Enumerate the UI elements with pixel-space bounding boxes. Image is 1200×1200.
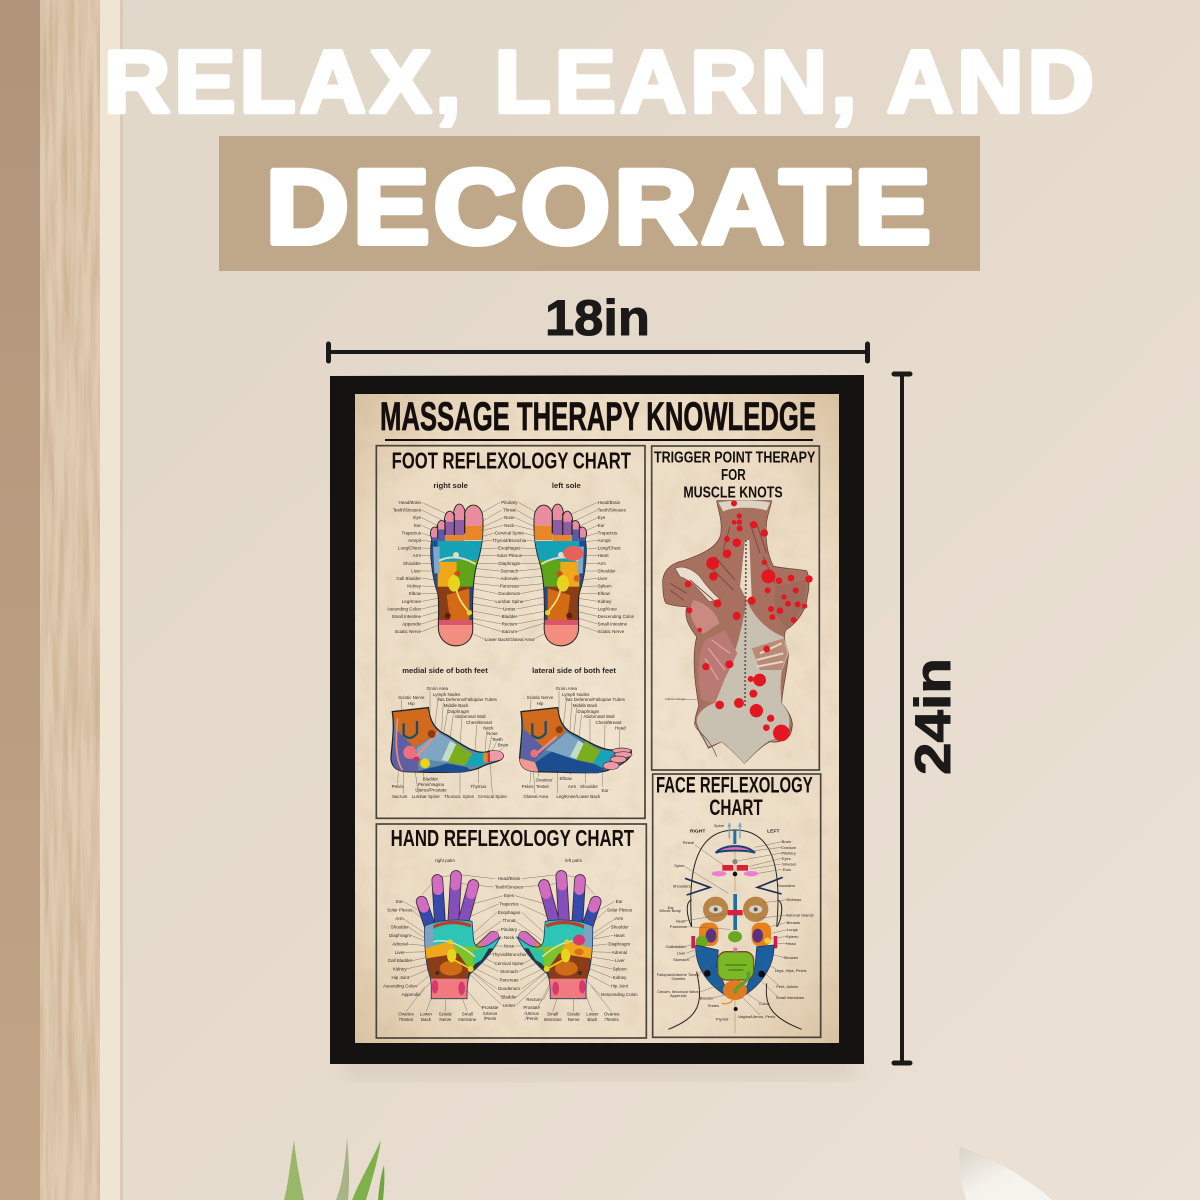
leader lines: hands xyxy=(403,875,615,1012)
labels: hands centre column xyxy=(492,876,526,1008)
labels: face: Ear xyxy=(668,905,674,910)
labels: medial foot: Chest/Breast xyxy=(466,720,493,725)
height dimension label: 24in xyxy=(905,658,961,775)
leader lines: side of feet xyxy=(398,691,619,793)
labels: left palm: Descending Colon xyxy=(601,992,638,997)
headline banner: DECORATE xyxy=(266,149,935,266)
leader lines: soles xyxy=(422,502,598,639)
labels: right sole left column: Appendix xyxy=(402,621,422,626)
labels: left palm: Sciatic xyxy=(567,1011,581,1016)
labels: face: Sinuses xyxy=(782,861,796,866)
labels: face: Bladder xyxy=(700,995,714,1000)
poster xyxy=(355,394,839,1043)
labels: left sole right column: Spleen xyxy=(598,583,612,588)
labels: left palm: Solar Plexus xyxy=(607,907,633,912)
labels: face: Pancreas xyxy=(670,924,687,929)
labels: lateral foot: Pelvis xyxy=(522,784,534,789)
labels: left sole right column: Arm xyxy=(598,561,606,566)
labels: face: Gallbladder xyxy=(665,944,687,949)
labels: left palm xyxy=(523,899,638,1022)
labels: lateral foot: Ear xyxy=(602,788,609,793)
heading: trigger point therapy: FOR xyxy=(721,467,746,484)
width dimension label: 18in xyxy=(545,290,650,346)
labels: left sole right column: Trapezius xyxy=(598,530,618,535)
sub-heading: lateral side: lateral side of both feet xyxy=(532,666,616,675)
labels: face: LEFT xyxy=(767,828,780,834)
labels: right sole left column: Ascending Colon xyxy=(387,606,422,611)
labels: lateral foot: Gluteal Area xyxy=(523,794,549,799)
labels: medial foot: Bladder xyxy=(423,776,439,781)
labels: right palm: Small xyxy=(462,1011,473,1016)
labels: right palm: Intensine xyxy=(458,1017,477,1022)
labels: hands centre column: Head/Brain xyxy=(498,876,521,881)
labels: lateral foot: Lymph Nodes xyxy=(562,692,590,697)
labels: left palm: Heart xyxy=(614,933,625,938)
labels: left palm: Intensine xyxy=(544,1017,562,1022)
labels: face: Kidneys xyxy=(787,897,801,902)
labels: face: Lungs xyxy=(787,927,798,932)
labels: left sole right column: Armpit xyxy=(598,538,611,543)
labels: medial foot: Neck xyxy=(483,725,494,730)
labels: right palm: Prostate xyxy=(482,1005,499,1010)
labels: face: Shoulders xyxy=(777,883,795,888)
labels: hands centre column: Teeth/Sinuses xyxy=(495,884,524,889)
labels: hands centre column: Stomach xyxy=(500,969,518,974)
labels: soles centre column: Adrenals xyxy=(500,576,519,581)
plant leaves xyxy=(284,1137,384,1200)
chart: right sole foot map xyxy=(428,503,488,648)
labels: hands centre column: Duodenum xyxy=(498,986,520,991)
labels: left palm: Liver xyxy=(615,958,625,963)
labels: left palm: Small xyxy=(547,1011,558,1016)
labels: left sole right column: Liver xyxy=(598,576,608,581)
labels: medial foot: Thymus xyxy=(470,784,487,789)
labels: right sole left column: Trapezius xyxy=(401,530,422,535)
headline line one: RELAX, LEARN, AND xyxy=(104,32,1098,131)
labels: medial foot: Lumbar Spine xyxy=(412,794,440,799)
labels: left sole right column: Head/Brain xyxy=(598,500,621,505)
labels: hands centre column: Ureter xyxy=(503,1003,516,1008)
labels: lateral foot: Ovaries/ xyxy=(536,777,553,782)
labels: face: Spine xyxy=(674,863,685,868)
labels: right palm: Liver xyxy=(395,950,405,955)
labels: right palm: Nerve xyxy=(439,1017,452,1022)
labels: lateral foot: Chest/Breast xyxy=(595,720,622,725)
labels: soles centre column: Esophagus xyxy=(498,545,521,550)
labels: lateral foot xyxy=(522,686,626,799)
labels: medial foot: Thoracic Spine xyxy=(444,794,474,799)
labels: medial foot: Cervical Spine xyxy=(478,794,507,799)
labels: medial foot: Pelvis xyxy=(392,784,404,789)
labels: face: RIGHT xyxy=(690,828,705,834)
panel: trigger point therapy xyxy=(652,446,819,770)
labels: right sole left column: Kidney xyxy=(407,583,422,588)
heading: face reflexology: FACE REFLEXOLOGY xyxy=(656,773,813,798)
labels: lateral foot: Hip xyxy=(537,701,544,706)
labels: left sole right column: Eye xyxy=(598,515,606,520)
labels: hands centre column: Pancreas xyxy=(500,977,519,982)
labels: lateral foot: Elbow xyxy=(560,776,573,781)
labels: lateral foot: Head xyxy=(615,725,626,730)
labels: hands centre column: Trapezius xyxy=(499,901,520,906)
labels: right palm: /Penis xyxy=(484,1016,497,1021)
picture frame xyxy=(330,375,864,1064)
chart: back muscles xyxy=(663,501,809,763)
sub-heading: left palm: left palm xyxy=(565,858,582,863)
heading: hand reflexology: HAND REFLEXOLOGY CHART xyxy=(391,825,634,851)
labels: medial foot: Abdominal Wall xyxy=(454,714,485,719)
labels: left palm: Prostate xyxy=(523,1005,541,1010)
labels: right sole left column: Teeth/Sinuses xyxy=(393,507,422,512)
heading: face reflexology xyxy=(656,773,813,820)
labels: left palm: Nerve xyxy=(568,1017,580,1022)
chart: lateral foot map xyxy=(520,708,632,773)
labels: hands centre column: Nose xyxy=(504,943,515,948)
labels: right palm: Shoulder xyxy=(391,924,409,929)
chart: left sole foot map xyxy=(529,503,589,648)
labels: left sole right column: Small Intestine xyxy=(598,621,628,626)
labels: face: Legs, Hips, Pelvis xyxy=(775,968,807,973)
sub-heading: left sole: left sole xyxy=(552,481,581,490)
labels: right sole left column: Leg/Knee xyxy=(402,599,422,604)
height dimension arrow xyxy=(894,374,910,1063)
labels: soles centre column: Bladder xyxy=(502,614,518,619)
labels: right palm: Kidney xyxy=(393,966,407,971)
labels: hands centre column: Cervical Spine xyxy=(495,961,524,966)
sub-heading: right palm: right palm xyxy=(435,858,455,863)
labels: face: Spleen xyxy=(786,934,799,939)
labels: medial foot: Nose xyxy=(487,731,498,736)
labels: left palm: /Penis xyxy=(525,1016,539,1021)
labels: face: Pituitary xyxy=(781,850,796,855)
labels: left sole right column: Leg/Knee xyxy=(598,606,617,611)
labels: face: Appendix xyxy=(670,993,687,998)
wooden door frame xyxy=(0,0,123,1200)
labels: right sole left column: Armpit xyxy=(408,538,422,543)
labels: right palm xyxy=(383,899,499,1022)
labels: face: Ovaries xyxy=(671,976,685,981)
labels: face: Feet, Ankles xyxy=(776,984,798,989)
labels: left sole right column: Lung/Chest xyxy=(598,545,621,550)
labels: face: Shoulders xyxy=(673,883,691,888)
labels: medial foot: Uterus/Prostate xyxy=(415,787,447,792)
labels: right sole left column: Shoulder xyxy=(403,561,422,566)
labels: left palm: Rectum xyxy=(526,997,542,1002)
heading: face reflexology: CHART xyxy=(709,795,763,820)
labels: face: Fallopian/Uterine Tubes, xyxy=(657,972,700,977)
labels: soles centre column: Ureter xyxy=(503,606,516,611)
labels: hands centre column: Bladder xyxy=(501,994,517,999)
labels: medial foot: Sciatic Nerve xyxy=(398,695,425,700)
labels: medial foot: Diaphragm xyxy=(447,709,470,714)
labels: right palm: /Uterus xyxy=(483,1011,498,1016)
labels: soles centre column: Cervical Spine xyxy=(495,530,524,535)
white cushion xyxy=(959,1147,1052,1200)
labels: soles centre column: Thyroid/Bronchia xyxy=(492,538,527,543)
labels: left palm: Ear xyxy=(616,899,623,904)
labels: face: Pineal xyxy=(683,840,694,845)
chart: red trigger points xyxy=(685,500,813,741)
labels: face: Liver xyxy=(677,950,686,955)
labels: left sole right column: Heart xyxy=(598,553,609,558)
labels: left sole right column xyxy=(598,500,635,634)
labels: left palm: Lower xyxy=(586,1011,599,1016)
labels: right sole left column: Ear xyxy=(414,523,422,528)
labels: right sole left column: Sciatic Nerve xyxy=(395,629,421,634)
labels: medial foot: Groin Area xyxy=(427,686,449,691)
labels: soles centre column xyxy=(485,500,535,642)
labels: face: Cranium xyxy=(781,845,797,850)
labels: soles centre column: Sacrum xyxy=(502,629,517,634)
poster title: MASSAGE THERAPY KNOWLEDGE xyxy=(380,395,816,439)
labels: left sole right column: Elbow xyxy=(598,591,611,596)
labels: left sole right column: Shoulder xyxy=(598,568,616,573)
labels: lateral foot: Abdominal Wall xyxy=(583,714,614,719)
labels: medial foot: Vas Deferens/Fallopian Tubes xyxy=(437,697,498,702)
labels: face: Ears xyxy=(783,867,791,872)
labels: face: Adrenal Glands xyxy=(786,912,814,917)
labels: left sole right column: Ear xyxy=(598,523,605,528)
labels: medial foot: Hip xyxy=(408,701,415,706)
labels: right sole left column: Liver xyxy=(411,568,421,573)
labels: soles centre column: Diaphragm xyxy=(498,561,521,566)
panel: hand reflexology chart xyxy=(376,824,646,1038)
labels: right sole left column xyxy=(387,500,422,634)
labels: left palm: Diaphragm xyxy=(608,941,631,946)
labels: face: Head xyxy=(786,941,796,946)
chart: left palm map xyxy=(516,876,596,1002)
labels: right sole left column: Gall Bladder xyxy=(396,576,421,581)
labels: soles centre column: Throat xyxy=(503,507,517,512)
labels: lateral foot: Diaphragm xyxy=(577,709,600,714)
labels: right palm: Gall Bladder xyxy=(388,958,413,963)
labels: face: Testes xyxy=(708,1003,719,1008)
labels: left sole right column: Kidney xyxy=(598,599,612,604)
labels: right palm: Sciatic xyxy=(439,1011,453,1016)
labels: left palm: Hip Joint xyxy=(611,983,629,988)
heading: trigger point therapy: TRIGGER POINT THERAPY xyxy=(654,450,816,467)
labels: lateral foot: Leg/Knee/Lower Back xyxy=(556,794,601,799)
labels: left sole right column: Descending Colon xyxy=(598,614,635,619)
panel: side-of-feet charts xyxy=(391,666,632,799)
labels: face: Whole Body xyxy=(659,908,681,913)
labels: right palm: Adrenal xyxy=(392,941,408,946)
labels: face: Cecum, Ileocecal Valve, xyxy=(657,989,700,994)
labels: right sole left column: Small Intestine xyxy=(392,614,421,619)
labels: right palm: Ascending Colon xyxy=(383,983,418,988)
labels: medial foot: Lymph Nodes xyxy=(433,692,461,697)
panel: face reflexology chart xyxy=(653,773,821,1037)
labels: soles centre column: Pancreas xyxy=(500,583,520,588)
labels: medial foot: Sacrum xyxy=(392,794,408,799)
labels: medial foot xyxy=(392,686,509,799)
labels: right sole left column: Head/Brain xyxy=(399,500,422,505)
labels: right palm: Back xyxy=(421,1017,432,1022)
labels: left palm: Adrenal xyxy=(612,950,627,955)
labels: soles centre column: Nose xyxy=(504,515,515,520)
labels: soles centre column: Lower Back/Gluteal Area xyxy=(485,637,535,642)
labels: lateral foot: Sciatic Nerve xyxy=(527,695,554,700)
chart: medial foot map xyxy=(391,708,503,773)
labels: right sole left column: Eye xyxy=(413,515,421,520)
heading: trigger point therapy: MUSCLE KNOTS xyxy=(683,484,783,501)
labels: right sole left column: Elbow xyxy=(409,591,422,596)
labels: soles centre column: Lumbar Spine xyxy=(495,599,524,604)
sub-heading: right sole: right sole xyxy=(433,481,468,490)
labels: right sole left column: Lung/Chest xyxy=(398,545,422,550)
labels: medial foot: Teeth xyxy=(492,737,503,742)
headline banner xyxy=(219,136,980,271)
chart: face map xyxy=(668,822,802,1033)
labels: right palm: Hip Joint xyxy=(392,975,410,980)
chart: back muscles: Inferior triangle xyxy=(665,697,686,701)
labels: right palm: Solar Plexus xyxy=(387,907,413,912)
labels: lateral foot: Middle Back xyxy=(573,703,598,708)
labels: face xyxy=(657,823,814,1021)
labels: soles centre column: Stomach xyxy=(500,568,519,573)
labels: face: Breasts xyxy=(787,920,800,925)
labels: left palm: /Testes xyxy=(605,1017,620,1022)
labels: left palm: Arm xyxy=(615,916,623,921)
labels: face: Thyroid xyxy=(715,1016,728,1021)
width dimension arrow xyxy=(328,344,868,361)
labels: soles centre column: Rectum xyxy=(502,621,517,626)
labels: right palm: Appendix xyxy=(402,992,421,997)
labels: face: Brain xyxy=(782,839,791,844)
chart: right palm map xyxy=(422,876,502,1002)
frame shadow xyxy=(345,1056,855,1078)
labels: medial foot: Brain xyxy=(498,742,509,747)
labels: face: Eyes xyxy=(782,856,791,861)
labels: face: Colon xyxy=(759,1001,770,1006)
labels: face: Stomach xyxy=(673,957,689,962)
heading: trigger point therapy xyxy=(654,450,816,501)
heading: foot reflexology: FOOT REFLEXOLOGY CHART xyxy=(392,447,631,473)
labels: left palm: Ovaries xyxy=(604,1011,620,1016)
labels: lateral foot: Shoulder xyxy=(580,784,598,789)
labels: right palm: Lower xyxy=(420,1011,433,1016)
panel: foot reflexology chart xyxy=(376,446,645,818)
labels: left palm: Back xyxy=(587,1017,598,1022)
labels: right sole left column: Arm xyxy=(413,553,421,558)
labels: face: Vagina/Uterus, Penis xyxy=(738,1014,775,1019)
labels: right palm: /Testes xyxy=(399,1017,414,1022)
labels: lateral foot: Arm xyxy=(568,784,576,789)
labels: lateral foot: Groin Area xyxy=(556,686,578,691)
labels: soles centre column: Duodenum xyxy=(498,591,521,596)
labels: hands centre column: Pituitary xyxy=(501,927,518,932)
labels: soles centre column: Solar Plexus xyxy=(497,553,523,558)
labels: left palm: Spleen xyxy=(613,966,627,971)
labels: face: Small Intestines xyxy=(776,995,804,1000)
labels: lateral foot: Vas Deferens/Fallopian Tubes xyxy=(565,697,626,702)
labels: right palm: Ovaries xyxy=(398,1011,414,1016)
labels: right palm: Arm xyxy=(395,916,404,921)
labels: left palm: Shoulder xyxy=(611,924,629,929)
sub-heading: medial side: medial side of both feet xyxy=(402,666,488,675)
labels: face: Heart xyxy=(676,918,686,923)
labels: hands centre column: Eyes xyxy=(504,893,515,898)
labels: left sole right column: Teeth/Sinuses xyxy=(598,507,627,512)
labels: left palm: Kidney xyxy=(613,975,627,980)
labels: soles centre column: Neck xyxy=(504,523,515,528)
labels: face: Sinuses xyxy=(784,955,798,960)
labels: medial foot: Penis/Vagina xyxy=(418,782,445,787)
labels: hands centre column: Throat xyxy=(503,918,516,923)
labels: left sole right column: Sciatic Nerve xyxy=(598,629,625,634)
labels: lateral foot: Testes xyxy=(536,784,550,789)
labels: hands centre column: Thyroid/Bronchia xyxy=(492,952,526,957)
labels: soles centre column: Pituitary xyxy=(501,500,518,505)
labels: medial foot: Middle Back xyxy=(444,703,469,708)
labels: right palm: Diaphragm xyxy=(389,933,411,938)
labels: hands centre column: Neck xyxy=(504,935,515,940)
labels: hands centre column: Esophagus xyxy=(498,910,521,915)
labels: face: Spine xyxy=(714,823,725,828)
labels: right palm: Ear xyxy=(396,899,404,904)
labels: left palm: /Uterus xyxy=(524,1011,540,1016)
